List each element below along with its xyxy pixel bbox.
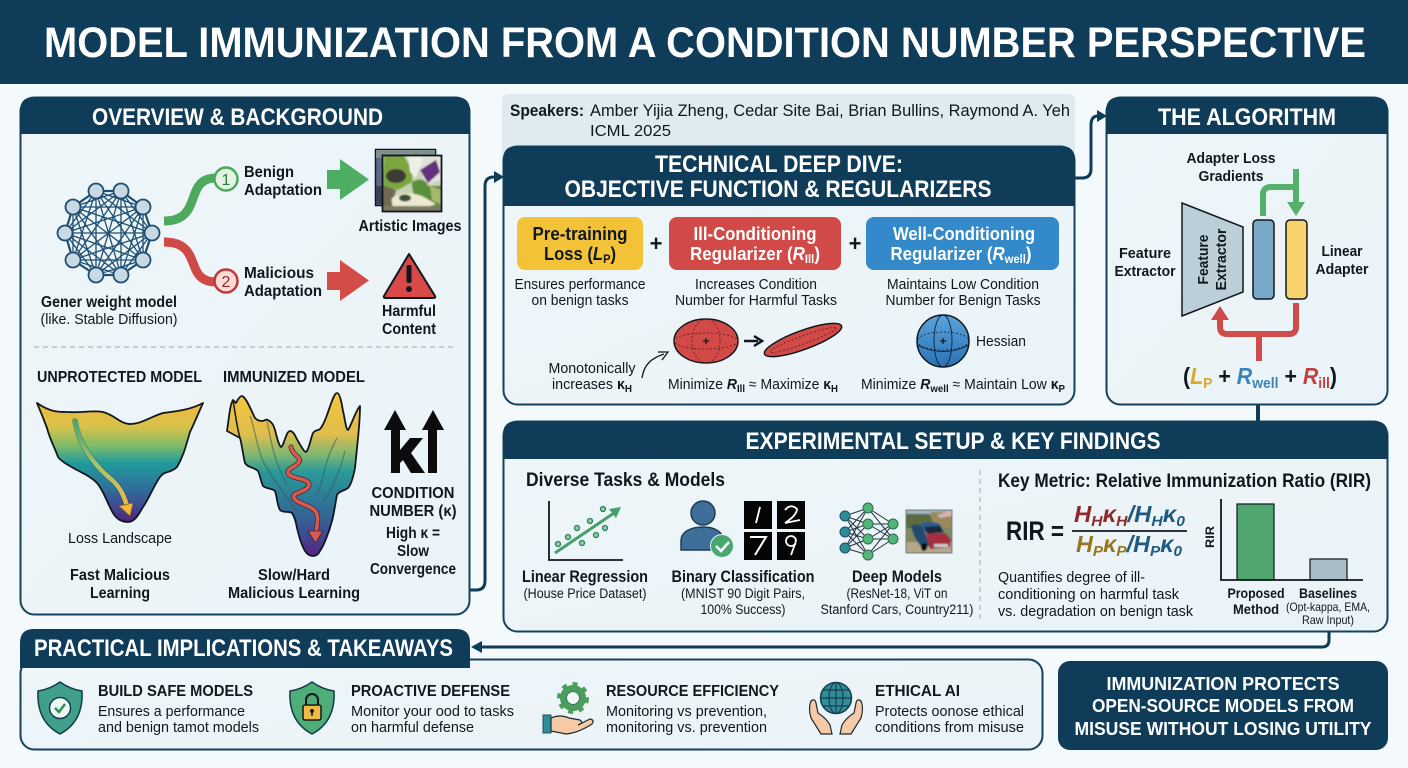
heading: the algorithm [1106,97,1388,134]
box: ill-conditioning regularizer: ) [814,244,820,264]
callout: key takeaway [1058,661,1388,750]
heading: technical deep dive [503,146,1075,206]
formula: RIR: 0 [1176,513,1186,530]
label: deep models: Deep Models [852,568,942,586]
text: proactive defense: Monitor your ood to tasks [351,704,514,720]
arrow: red loss flow [1211,303,1296,361]
title banner [0,0,1408,84]
icon: kappa with up arrows [384,410,444,473]
icon: round red ellipsoid [674,319,738,363]
formula: combined objective: R [1303,363,1319,389]
formula: minimize ill: κ [823,377,832,393]
arrow: overview to technical arrowhead [494,171,504,183]
text: proactive defense [351,683,514,736]
box: pre-training loss: Loss (L [544,244,604,264]
panel: speakers: ICML 2025 [590,123,671,140]
text: pre-training description [514,277,646,309]
heading: experimental setup [503,421,1388,459]
chart: smooth loss landscape [37,403,203,522]
heading: overview [20,97,470,134]
formula: minimize ill: ≈ Maximize [745,377,823,393]
label: adapter loss gradients: Gradients [1198,169,1264,185]
box: pre-training loss: Pre-training [532,224,628,244]
text: ethical AI: conditions from misuse [875,720,1024,736]
callout: key takeaway: MISUSE WITHOUT LOSING UTILITY [1074,719,1372,739]
label: harmful content [382,303,437,338]
text: pre-training description: on benign tasks [532,293,628,309]
callout: key takeaway: OPEN-SOURCE MODELS FROM [1092,696,1354,716]
text: well-conditioning description [886,277,1040,309]
chart: RIR bar chart: RIR [1203,526,1217,548]
diagram: feature extractor trapezoid [1182,203,1243,316]
text: model label: (like. Stable Diffusion) [40,311,178,328]
formula: RIR: κ [1103,501,1117,527]
chart: RIR bar chart: Proposed [1228,585,1284,601]
formula: minimize well: κ [1051,377,1059,393]
box: pre-training loss: P [603,252,610,266]
text: benign adaptation: Benign [244,164,294,181]
formula: RIR: P [1116,543,1128,560]
heading: the algorithm: THE ALGORITHM [1158,104,1336,131]
panel: practical implications [20,629,1042,750]
image: MNIST digits [744,501,805,560]
chart: RIR bar chart: (Opt-kappa, EMA, [1286,600,1370,614]
text: condition number: Slow [397,543,430,560]
text: ill-conditioning description [675,277,837,309]
heading: experimental setup: EXPERIMENTAL SETUP & KEY FINDINGS [746,428,1160,455]
chart: RIR bar chart: Raw Input) [1302,613,1354,627]
formula: combined objective: + [1279,363,1303,389]
diagram: linear adapter layer [1286,220,1307,299]
panel: overview and background [20,97,470,614]
text: condition number: High κ = [386,525,440,542]
box: well-conditioning regularizer [866,217,1059,270]
text: resource efficiency: Monitoring vs prevention, [606,704,767,720]
label: harmful content: Content [382,321,437,338]
text: well-conditioning description: Number for Benign Tasks [886,293,1040,309]
text: RIR description: vs. degradation on benign task [998,603,1193,620]
label: binary classification: (MNIST 90 Digit Pairs, [681,586,805,601]
formula: minimize ill: Minimize R [668,377,737,393]
image: car photo [906,510,952,553]
heading: overview: OVERVIEW & BACKGROUND [92,104,383,131]
formula: minimize well: ≈ Maintain Low [949,377,1051,393]
text: model label: Gener weight model [41,294,177,311]
formula: RIR: /H [1126,531,1150,557]
box: pre-training loss [517,217,643,270]
label: linear adapter: Linear [1322,243,1363,260]
arrow: ellipsoid transformation [744,336,762,346]
label: artistic images: Artistic Images [358,218,462,235]
text: benign adaptation: Adaptation [244,182,322,199]
icon: warning triangle [384,254,435,298]
text: malicious adaptation: Adaptation [244,283,322,300]
text: monotonically increases: Monotonically [548,361,636,377]
text: condition number: NUMBER (κ) [370,503,456,520]
image: artistic images [376,150,442,212]
heading: immunized model: IMMUNIZED MODEL [223,369,365,386]
chart: RIR bar chart: Method [1233,601,1279,617]
label: hessian: Hessian [976,334,1026,350]
heading: technical deep dive: TECHNICAL DEEP DIVE: [655,151,903,178]
formula: combined objective: + [1212,363,1237,389]
text: benign adaptation [244,164,322,199]
label: fast malicious learning: Fast Malicious [70,567,170,584]
formula: combined objective: ) [1330,363,1337,389]
label: binary classification [672,568,814,617]
arrow: benign output [327,159,369,200]
label: fast malicious learning: Learning [90,585,150,602]
chart: RIR bar chart [1203,499,1370,627]
label: binary classification: Binary Classification [672,568,814,586]
text: condition number: CONDITION [372,485,454,502]
label: harmful content: Harmful [382,303,436,320]
arrow: technical deep dive to algorithm [1075,116,1100,178]
text: well-conditioning description: Maintains Low Condition [887,277,1039,293]
label: linear regression [522,568,648,601]
text: model label [40,294,178,328]
arrow: overview to technical deep dive [469,177,497,590]
text: build safe models [98,683,259,736]
arrow: green gradient flow [1263,169,1305,216]
text: ethical AI: ETHICAL AI [875,683,960,700]
text: condition number: Convergence [370,561,456,578]
heading: unprotected model: UNPROTECTED MODEL [37,369,202,386]
label: feature extractor: Feature [1119,245,1171,262]
diagram: feature extractor trapezoid: Extractor [1213,228,1230,290]
label: loss landscape: Loss Landscape [68,531,172,547]
text: ill-conditioning description: Number for Harmful Tasks [675,293,837,309]
formula: RIR: H [1151,513,1164,530]
text: pre-training description: Ensures performance [514,277,646,293]
heading: practical implications: PRACTICAL IMPLICATIONS & TAKEAWAYS [34,635,453,662]
arrow: technical to algorithm arrowhead [1097,110,1107,122]
icon: stretched red ellipsoid [761,317,845,363]
label: deep models [820,568,974,617]
formula: RIR: κ [1163,501,1177,527]
arrow: experimental to takeaways [480,632,1329,647]
arrow: malicious path [164,242,238,292]
icon: shield with lock [290,682,334,734]
text: monotonically increases: H [625,384,632,395]
subheading: key metric: Key Metric: Relative Immunization Ratio (RIR) [998,471,1371,492]
formula: combined objective: well [1251,375,1279,392]
text: RIR description [998,569,1193,620]
box: ill-conditioning regularizer: Regularizer (R [690,244,806,264]
symbol: plus: + [650,231,662,256]
formula: RIR: 0 [1174,543,1183,560]
text: monotonically increases [548,361,636,395]
arrow: benign path [164,168,238,221]
formula: minimize ill: Ill [737,384,745,395]
icon: neural network model [58,184,160,282]
formula: minimize well: well [929,384,949,395]
chart: rugged loss landscape [227,393,360,556]
icon: gear in hand [543,684,593,734]
heading: technical deep dive: OBJECTIVE FUNCTION & REGULARIZERS [564,176,992,203]
formula: RIR: H [1116,513,1129,530]
text: RIR description: conditioning on harmful task [998,586,1179,603]
box: well-conditioning regularizer: well [1004,252,1026,266]
formula: RIR: H [1076,531,1093,557]
label: slow malicious learning: Malicious Learning [228,585,360,602]
diagram: blue layer [1253,220,1274,299]
panel: experimental setup [503,421,1388,632]
icon: shield with check [38,682,82,734]
text: resource efficiency [606,683,779,736]
arrow: takeaways arrowhead [471,641,482,653]
label: linear adapter [1316,243,1369,278]
label: slow malicious learning: Slow/Hard [258,567,330,584]
label: slow malicious learning [228,567,360,602]
label: adapter loss gradients: Adapter Loss [1186,151,1276,167]
text: build safe models: Ensures a performance [98,704,245,720]
panel: speakers: Amber Yijia Zheng, Cedar Site Bai, Brian Bullins, Raymond A. Yeh [590,102,1070,120]
callout: key takeaway: IMMUNIZATION PROTECTS [1106,674,1340,694]
panel: the algorithm [1106,97,1388,404]
text: build safe models: BUILD SAFE MODELS [98,683,253,700]
label: deep models: (ResNet-18, ViT on [846,586,948,601]
label: linear regression: Linear Regression [522,568,648,586]
panel: technical deep dive [503,146,1075,404]
icon: hessian sphere [917,315,969,367]
box: well-conditioning regularizer: Regularizer (R [890,244,1006,264]
icon: deep network [840,503,898,560]
heading: practical implications [20,629,470,668]
formula: RIR [1006,501,1187,560]
label: linear adapter: Adapter [1316,261,1369,278]
arrow: malicious path: 2 [222,274,231,291]
label: linear regression: (House Price Dataset) [524,586,646,601]
text: malicious adaptation: Malicious [244,265,314,282]
formula: RIR: P [1093,543,1104,560]
arrow: malicious output [327,260,369,301]
text: resource efficiency: RESOURCE EFFICIENCY [606,683,779,700]
box: well-conditioning regularizer: Well-Conditioning [893,224,1035,244]
text: malicious adaptation [244,265,322,300]
text: proactive defense: on harmful defense [351,720,474,736]
box: ill-conditioning regularizer: Ill-Conditioning [694,224,816,244]
box: ill-conditioning regularizer: Ill [805,252,814,266]
text: proactive defense: PROACTIVE DEFENSE [351,683,510,700]
formula: RIR: /H [1126,501,1152,527]
formula: RIR: H [1091,513,1104,530]
formula: combined objective: ill [1318,375,1330,392]
formula: RIR: κ [1103,531,1117,557]
chart: RIR bar chart: Baselines [1299,585,1357,601]
subheading: diverse tasks: Diverse Tasks & Models [526,470,725,491]
formula: RIR: κ [1160,531,1174,557]
formula: RIR: P [1150,543,1161,560]
panel: speakers [502,94,1075,156]
formula: combined objective: R [1237,363,1253,389]
formula: RIR: RIR = [1006,516,1064,546]
text: ethical AI: Protects oonose ethical [875,704,1024,720]
arrow: algorithm to experimental [1256,405,1260,422]
diagram: feature extractor trapezoid: Feature [1195,234,1212,284]
arrow: benign path: 1 [222,172,231,189]
formula: minimize ill: H [831,384,838,395]
icon: person with check [681,501,734,558]
label: binary classification: 100% Success) [700,602,786,617]
formula: minimize well: Minimize R [861,377,931,393]
formula: combined objective: P [1203,375,1212,392]
label: fast malicious learning [70,567,170,602]
chart: linear regression [549,501,623,560]
text: build safe models: and benign tamot models [98,720,259,736]
box: pre-training loss: ) [610,244,616,264]
symbol: plus: + [849,231,861,256]
text: ethical AI [875,683,1024,736]
arrow: monotonically increases curve [642,352,668,378]
text: monotonically increases: increases κ [552,377,625,393]
box: well-conditioning regularizer: ) [1026,244,1032,264]
panel: speakers: Speakers: [510,102,584,120]
text: ill-conditioning description: Increases Condition [695,277,817,293]
formula: minimize well: P [1059,384,1065,395]
label: feature extractor: Extractor [1114,263,1176,280]
label: feature extractor [1114,245,1176,280]
icon: globe in hands [810,682,862,734]
formula: combined objective: (L [1183,363,1204,389]
box: ill-conditioning regularizer [669,217,841,270]
text: resource efficiency: monitoring vs. prevention [606,720,767,736]
text: condition number [370,485,456,578]
label: deep models: Stanford Cars, Country211) [820,602,974,617]
label: adapter loss gradients [1186,151,1276,185]
text: RIR description: Quantifies degree of ill- [998,569,1145,586]
formula: RIR: H [1074,501,1092,527]
